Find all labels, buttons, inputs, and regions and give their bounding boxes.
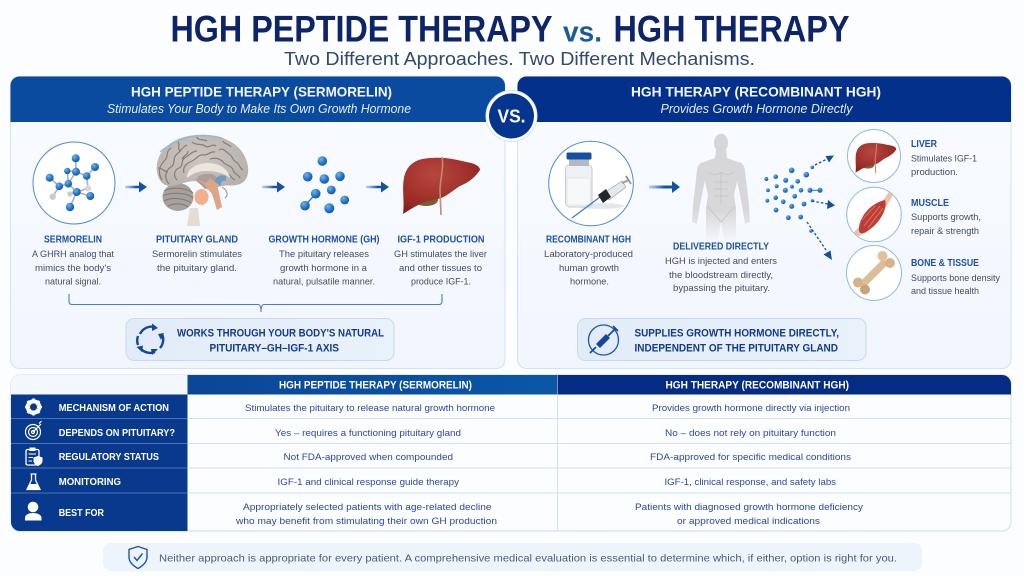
- icon: vial and syringe: [549, 141, 633, 226]
- row: best for: Appropriately selected patients with age-related decline: [243, 502, 492, 513]
- step: sermorelin text: SERMORELIN: [44, 235, 102, 246]
- row: mechanism of action: Provides growth hormone directly via injection: [652, 403, 850, 414]
- step: IGF-1 production text: GH stimulates the liver: [394, 249, 487, 260]
- comparison table: [11, 375, 1011, 531]
- callout: natural axis: WORKS THROUGH YOUR BODY'S NATURAL: [177, 328, 384, 340]
- panel header: recombinant: [518, 76, 1011, 122]
- panel header: peptide: Stimulates Your Body to Make Its Own Growth Hormone: [107, 102, 411, 116]
- panel header: recombinant: HGH THERAPY (RECOMBINANT HGH): [631, 84, 881, 100]
- row label column: [11, 394, 188, 531]
- target: liver: [848, 130, 977, 182]
- target: liver: production.: [911, 167, 958, 178]
- row: monitoring: IGF-1 and clinical response guide therapy: [278, 477, 459, 488]
- step: pituitary gland text: the pituitary gland.: [157, 263, 237, 274]
- row: mechanism of action: MECHANISM OF ACTION: [59, 402, 169, 414]
- step: recombinant HGH text: Laboratory-produced: [544, 249, 633, 260]
- step: pituitary gland text: [152, 235, 242, 274]
- target: bone and tissue: and tissue health: [911, 286, 979, 297]
- icon: human body: [692, 134, 750, 240]
- target: muscle: [847, 187, 981, 242]
- VS badge: VS.: [498, 106, 526, 126]
- row: best for: [25, 502, 863, 527]
- icon: shield check: [129, 546, 147, 568]
- icon: person: [25, 502, 42, 520]
- table header: HGH PEPTIDE THERAPY (SERMORELIN): [279, 380, 472, 392]
- arrow: to bone: [807, 222, 832, 260]
- row: depends on pituitary: DEPENDS ON PITUITARY?: [59, 427, 175, 439]
- title: HGH THERAPY: [614, 8, 850, 50]
- step: sermorelin text: [32, 235, 114, 288]
- panel header: peptide: [10, 76, 505, 122]
- target: bone and tissue: [846, 246, 1000, 300]
- icon: target: [26, 421, 42, 440]
- icon: brain with pituitary gland: [157, 135, 248, 226]
- step: delivered directly text: HGH is injected and enters: [665, 256, 777, 267]
- arrow: brain to hormone: [262, 182, 285, 192]
- icon: dispersing hormone particles: [764, 166, 822, 233]
- title: HGH PEPTIDE THERAPY: [170, 8, 553, 50]
- icon: cycle arrows: [136, 324, 164, 355]
- step: sermorelin text: natural signal.: [45, 277, 101, 288]
- table header: [11, 375, 1011, 394]
- bracket: [69, 294, 442, 312]
- row: regulatory status: FDA-approved for specific medical conditions: [650, 452, 851, 463]
- step: IGF-1 production text: IGF-1 PRODUCTION: [398, 235, 484, 246]
- step: delivered directly text: the bloodstream directly,: [669, 270, 773, 281]
- panel: HGH therapy: [518, 76, 1011, 368]
- icon: growth hormone molecules: [300, 156, 349, 213]
- row: regulatory status: Not FDA-approved when compounded: [284, 452, 453, 463]
- icon: flask: [27, 474, 40, 490]
- step: recombinant HGH text: RECOMBINANT HGH: [546, 235, 631, 246]
- step: IGF-1 production text: [394, 235, 487, 288]
- step: growth hormone text: growth hormone in a: [280, 263, 368, 274]
- row: best for: who may benefit from stimulating their own GH production: [235, 516, 497, 527]
- step: recombinant HGH text: [544, 235, 633, 288]
- row: depends on pituitary: No – does not rely on pituitary function: [665, 428, 836, 439]
- target: bone and tissue: BONE & TISSUE: [911, 258, 979, 269]
- title: [170, 8, 850, 50]
- icon: gear: [25, 398, 42, 416]
- disclaimer footer: Neither approach is appropriate for every patient. A comprehensive medical evaluation is essential to determine which, if either, option is right for you.: [159, 552, 897, 564]
- panel header: peptide: HGH PEPTIDE THERAPY (SERMORELIN): [131, 84, 392, 100]
- row: monitoring: MONITORING: [59, 476, 121, 488]
- arrow: molecule to brain: [125, 182, 147, 192]
- target: liver: Stimulates IGF-1: [911, 154, 977, 164]
- table header: HGH THERAPY (RECOMBINANT HGH): [666, 380, 849, 392]
- row: regulatory status: REGULATORY STATUS: [59, 451, 159, 463]
- row: best for: or approved medical indications: [677, 516, 820, 527]
- icon: liver: [403, 157, 480, 215]
- callout: natural axis: [126, 318, 394, 360]
- arrow: hormone to liver: [366, 182, 389, 192]
- row: depends on pituitary: Yes – requires a functioning pituitary gland: [275, 428, 461, 439]
- step: growth hormone text: natural, pulsatile manner.: [273, 277, 375, 288]
- row: best for: BEST FOR: [59, 507, 104, 519]
- icon: syringe in circle: [588, 325, 618, 355]
- target: liver: LIVER: [911, 139, 938, 150]
- title: vs.: [563, 16, 602, 48]
- target: muscle: Supports growth,: [911, 212, 981, 223]
- step: delivered directly text: DELIVERED DIRECTLY: [673, 242, 769, 252]
- target: muscle: MUSCLE: [911, 198, 949, 209]
- row: monitoring: IGF-1, clinical response, and safety labs: [664, 477, 836, 488]
- icon: clipboard with shield: [26, 448, 42, 466]
- callout: natural axis: PITUITARY–GH–IGF-1 AXIS: [210, 343, 339, 355]
- step: delivered directly text: [665, 242, 777, 294]
- step: pituitary gland text: Sermorelin stimulates: [152, 249, 242, 260]
- panel: HGH peptide therapy: [10, 76, 505, 368]
- step: delivered directly text: bypassing the pituitary.: [673, 283, 770, 294]
- row: mechanism of action: Stimulates the pituitary to release natural growth hormone: [245, 403, 495, 414]
- row: monitoring: [27, 474, 836, 490]
- step: pituitary gland text: PITUITARY GLAND: [156, 235, 238, 246]
- panel header: recombinant: Provides Growth Hormone Directly: [660, 102, 853, 116]
- step: IGF-1 production text: and other tissues to: [399, 263, 482, 274]
- step: growth hormone text: [268, 235, 380, 288]
- step: recombinant HGH text: human growth: [559, 263, 619, 274]
- callout: direct supply: SUPPLIES GROWTH HORMONE DIRECTLY,: [634, 328, 839, 340]
- target: muscle: repair & strength: [911, 226, 979, 237]
- step: sermorelin text: A GHRH analog that: [32, 249, 114, 260]
- target: bone and tissue: Supports bone density: [911, 273, 1000, 284]
- step: growth hormone text: The pituitary releases: [279, 249, 369, 260]
- row: regulatory status: [26, 448, 851, 466]
- subtitle: Two Different Approaches. Two Different Mechanisms.: [284, 48, 755, 69]
- step: IGF-1 production text: produce IGF-1.: [411, 277, 471, 288]
- row: best for: Patients with diagnosed growth hormone deficiency: [635, 502, 863, 513]
- arrow: to liver: [815, 156, 834, 165]
- callout: direct supply: [578, 318, 866, 360]
- disclaimer footer: [103, 543, 922, 571]
- icon: sermorelin molecule: [33, 142, 115, 224]
- table background: [11, 375, 1011, 531]
- row: depends on pituitary: [26, 421, 836, 440]
- step: growth hormone text: GROWTH HORMONE (GH): [268, 235, 380, 246]
- arrow: to muscle: [812, 200, 835, 209]
- arrow: vial to body: [649, 181, 680, 193]
- VS badge: [486, 90, 537, 142]
- step: sermorelin text: mimics the body's: [35, 263, 111, 274]
- row: mechanism of action: [25, 398, 850, 416]
- step: recombinant HGH text: hormone.: [570, 277, 609, 288]
- callout: direct supply: INDEPENDENT OF THE PITUITARY GLAND: [634, 343, 838, 355]
